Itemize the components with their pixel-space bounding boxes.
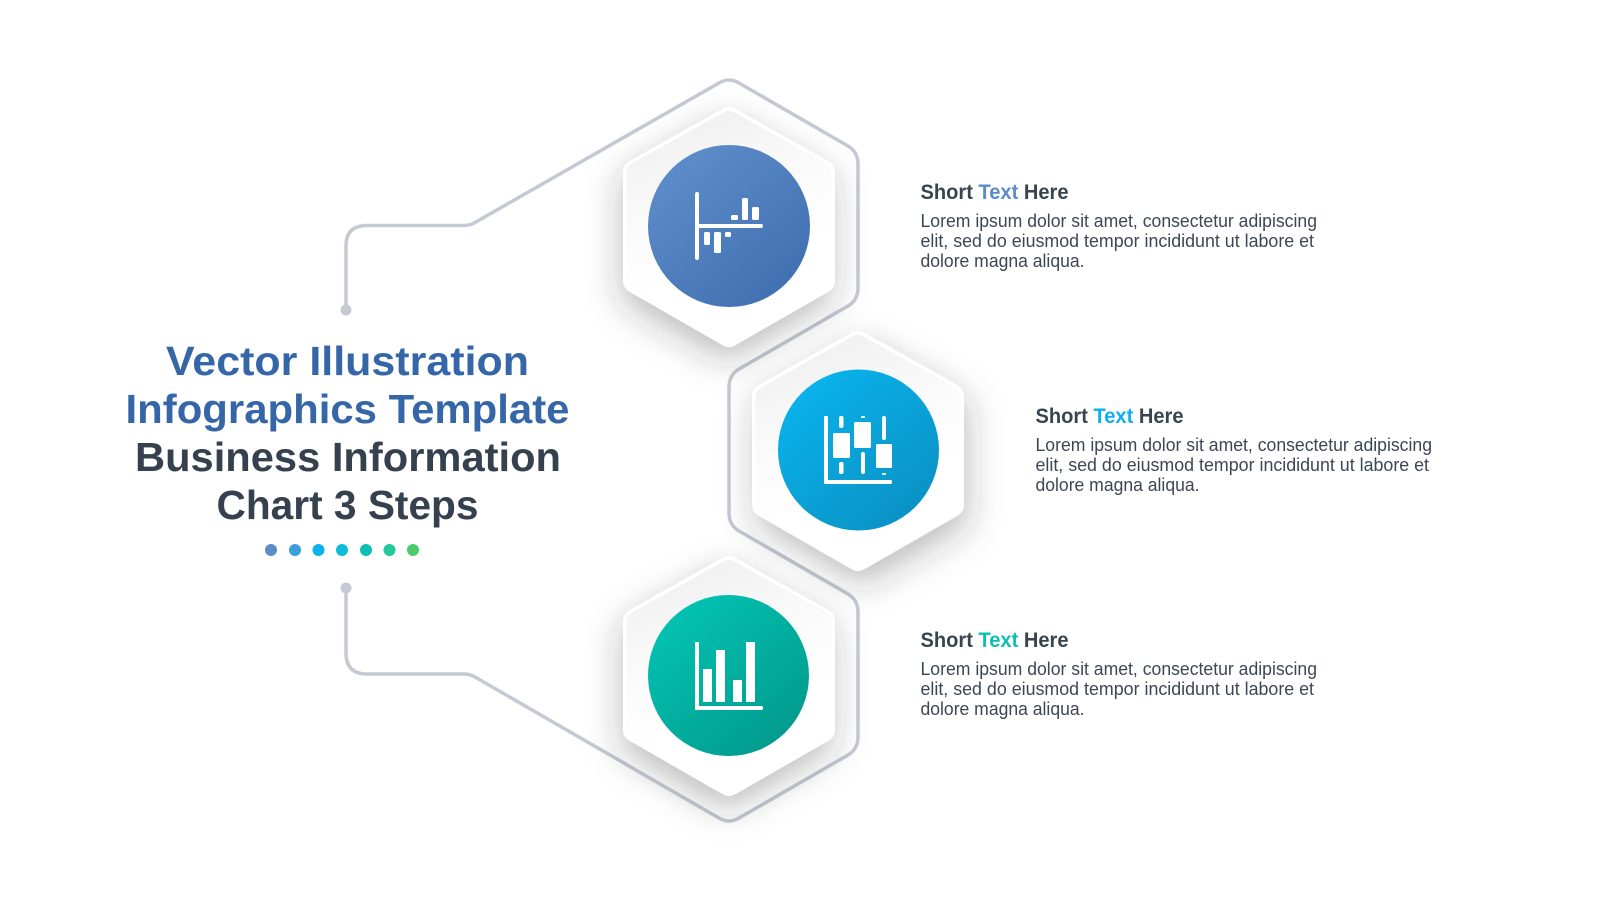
- step 2 text: dolore magna aliqua.: [1036, 475, 1200, 495]
- title: Business Information: [135, 434, 561, 480]
- title: [126, 338, 570, 528]
- step 3 text: dolore magna aliqua.: [920, 699, 1084, 719]
- step 1 text: Lorem ipsum dolor sit amet, consectetur adipiscing: [920, 211, 1317, 231]
- step 3 text: Lorem ipsum dolor sit amet, consectetur adipiscing: [920, 659, 1317, 679]
- step 1 text: dolore magna aliqua.: [920, 251, 1084, 271]
- icon: diverging bar chart: [695, 192, 763, 260]
- icon: bar chart: [695, 642, 763, 710]
- step 3 circle: [648, 595, 809, 756]
- step 1 circle: [648, 145, 810, 307]
- step 3 text: Short Text Here: [920, 629, 1068, 652]
- step 3 text: elit, sed do eiusmod tempor incididunt ut labore et: [920, 679, 1314, 699]
- step 2 circle: [778, 370, 939, 530]
- step 2 text: Lorem ipsum dolor sit amet, consectetur adipiscing: [1036, 435, 1432, 455]
- step 1 text: Short Text Here: [920, 181, 1068, 204]
- step 2 text: [1036, 405, 1432, 495]
- step 3 hexagon: [635, 568, 823, 784]
- title: Vector Illustration: [166, 338, 529, 384]
- connector outline through all three hexagons: [340, 80, 858, 821]
- step 2 text: elit, sed do eiusmod tempor incididunt ut labore et: [1036, 455, 1429, 475]
- step 2 hexagon: [764, 343, 952, 559]
- title: Infographics Template: [126, 386, 570, 432]
- title: Chart 3 Steps: [216, 482, 478, 528]
- step 3 text: [920, 629, 1317, 719]
- step 2 text: Short Text Here: [1036, 405, 1184, 428]
- step 1 text: elit, sed do eiusmod tempor incididunt ut labore et: [920, 231, 1314, 251]
- step 1 hexagon: [635, 119, 823, 335]
- icon: candlestick chart: [824, 416, 892, 484]
- step 1 text: [920, 181, 1317, 271]
- dot row: [265, 544, 419, 556]
